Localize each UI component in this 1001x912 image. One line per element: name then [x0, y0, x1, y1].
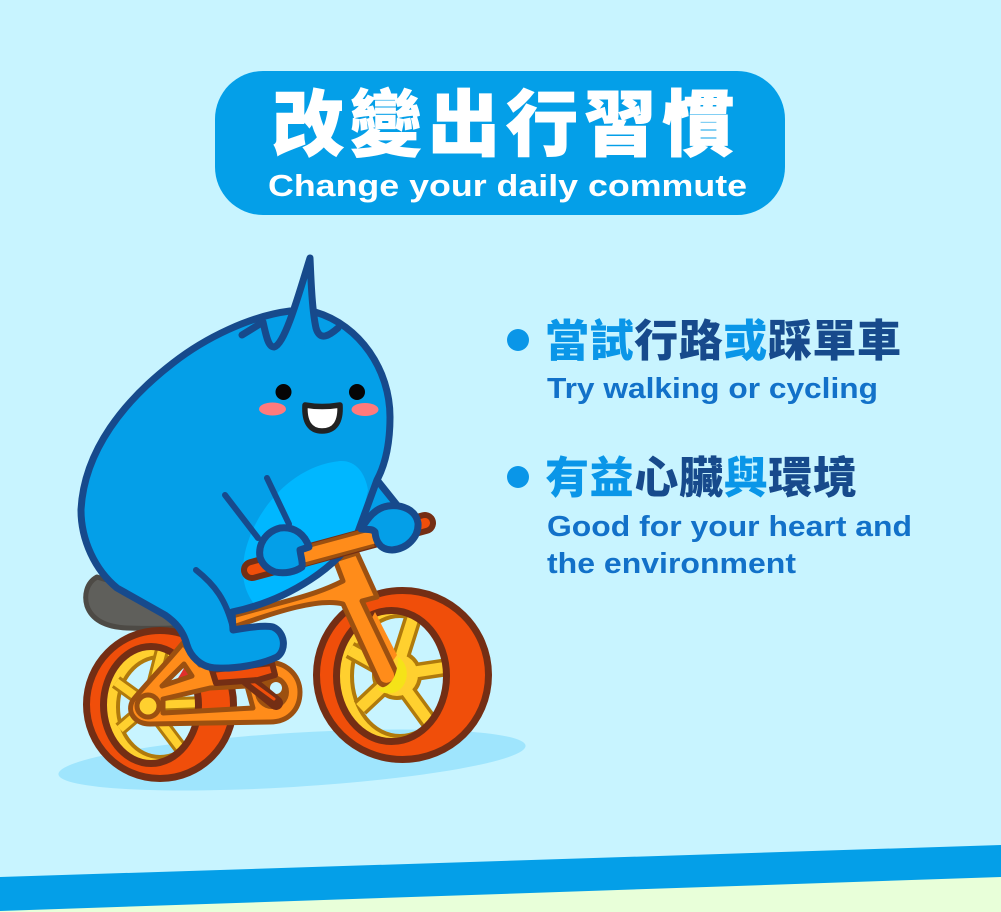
title banner — [215, 71, 785, 215]
bicycle seat — [86, 577, 180, 628]
front wheel — [316, 590, 488, 760]
yellow front hub — [377, 657, 407, 693]
chinese title: 改變出行習慣 — [272, 86, 734, 166]
bullet: heart and environment — [507, 454, 912, 580]
right hand — [361, 506, 418, 550]
rear wheel — [86, 630, 234, 780]
handlebar — [252, 523, 425, 570]
left hand — [260, 528, 309, 573]
mascot body — [81, 258, 397, 668]
bottom band — [0, 845, 1001, 912]
mouth — [305, 405, 340, 431]
chinese heading one: 當試行路或踩單車 — [545, 317, 901, 366]
head spike — [274, 258, 316, 352]
pedal and crank — [212, 663, 276, 703]
bicycle frame and fork — [225, 553, 397, 685]
english line three: the environment — [547, 548, 796, 580]
chinese heading two: 有益心臟與環境 — [545, 454, 857, 503]
english line two: Good for your heart and — [547, 511, 912, 543]
english title: Change your daily commute — [268, 168, 747, 203]
illustration: blue mascot riding a bicycle — [81, 258, 488, 780]
ground shadow — [57, 719, 527, 801]
english line one: Try walking or cycling — [547, 373, 878, 405]
mascot face — [259, 384, 378, 431]
bullet: walking or cycling — [507, 317, 901, 405]
rear chain stay and chain case — [131, 643, 300, 724]
belly — [243, 461, 368, 605]
arm and leg crease lines — [196, 478, 289, 628]
